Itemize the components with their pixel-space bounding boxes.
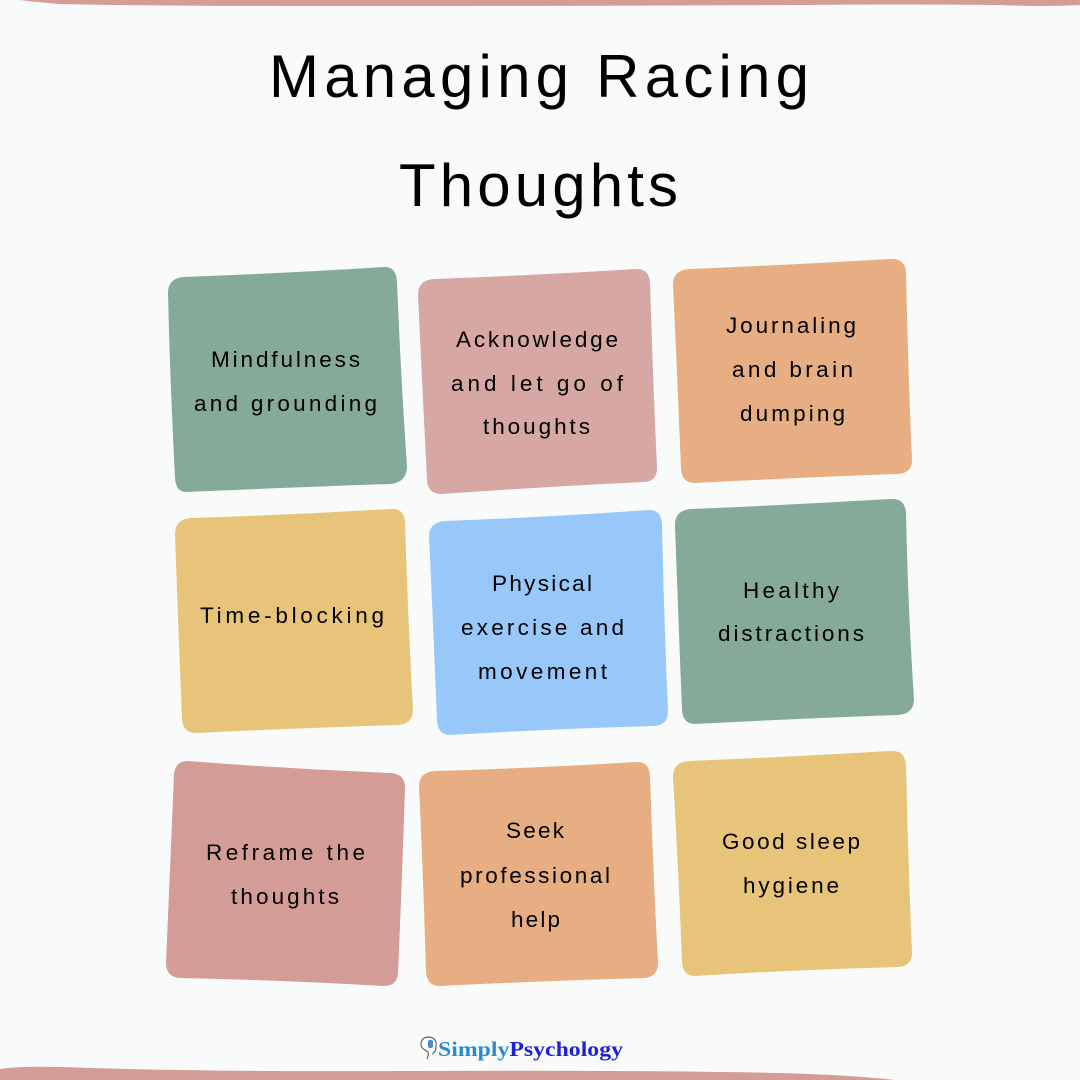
card: mindfulness and grounding: Mindfulness <box>211 347 360 372</box>
card: reframe the thoughts <box>166 761 405 986</box>
title <box>269 43 809 219</box>
card: healthy distractions: Healthy <box>743 578 840 603</box>
icon: head with microphone <box>421 1037 436 1059</box>
card: physical exercise and movement: movement <box>478 659 608 684</box>
card: seek professional help <box>419 762 658 986</box>
card: good sleep hygiene: hygiene <box>743 873 839 898</box>
bottom border stripe <box>0 1067 895 1080</box>
card: acknowledge and let go of thoughts: and let go of <box>451 371 624 396</box>
card: journaling and brain dumping <box>673 259 912 483</box>
card: seek professional help: professional <box>460 863 610 888</box>
card: acknowledge and let go of thoughts: thoughts <box>483 414 590 439</box>
card: good sleep hygiene: Good sleep <box>722 829 860 854</box>
title: Managing Racing <box>269 43 809 110</box>
card: good sleep hygiene <box>673 751 912 976</box>
card: journaling and brain dumping: dumping <box>740 401 845 426</box>
card: time-blocking: Time-blocking <box>200 603 384 628</box>
card: journaling and brain dumping: Journaling <box>726 313 856 338</box>
card: healthy distractions: distractions <box>718 621 864 646</box>
card: journaling and brain dumping: and brain <box>732 357 853 382</box>
card: mindfulness and grounding: and grounding <box>194 391 377 416</box>
card: healthy distractions <box>675 499 914 724</box>
card: physical exercise and movement: exercise and <box>461 615 624 640</box>
card: reframe the thoughts: thoughts <box>231 884 339 909</box>
top border stripe <box>20 0 1080 6</box>
card: physical exercise and movement <box>429 510 668 735</box>
card: seek professional help: Seek <box>506 818 565 843</box>
card: seek professional help: help <box>511 907 560 932</box>
card: reframe the thoughts: Reframe the <box>206 840 365 865</box>
title: Thoughts <box>399 152 678 219</box>
logo: Simply Psychology: Simply Psychology <box>438 1037 623 1061</box>
card: mindfulness and grounding <box>168 267 407 492</box>
card: physical exercise and movement: Physical <box>492 571 592 596</box>
card: acknowledge and let go of thoughts <box>418 269 657 494</box>
card: time-blocking <box>175 509 413 733</box>
card: acknowledge and let go of thoughts: Acknowledge <box>456 327 618 352</box>
